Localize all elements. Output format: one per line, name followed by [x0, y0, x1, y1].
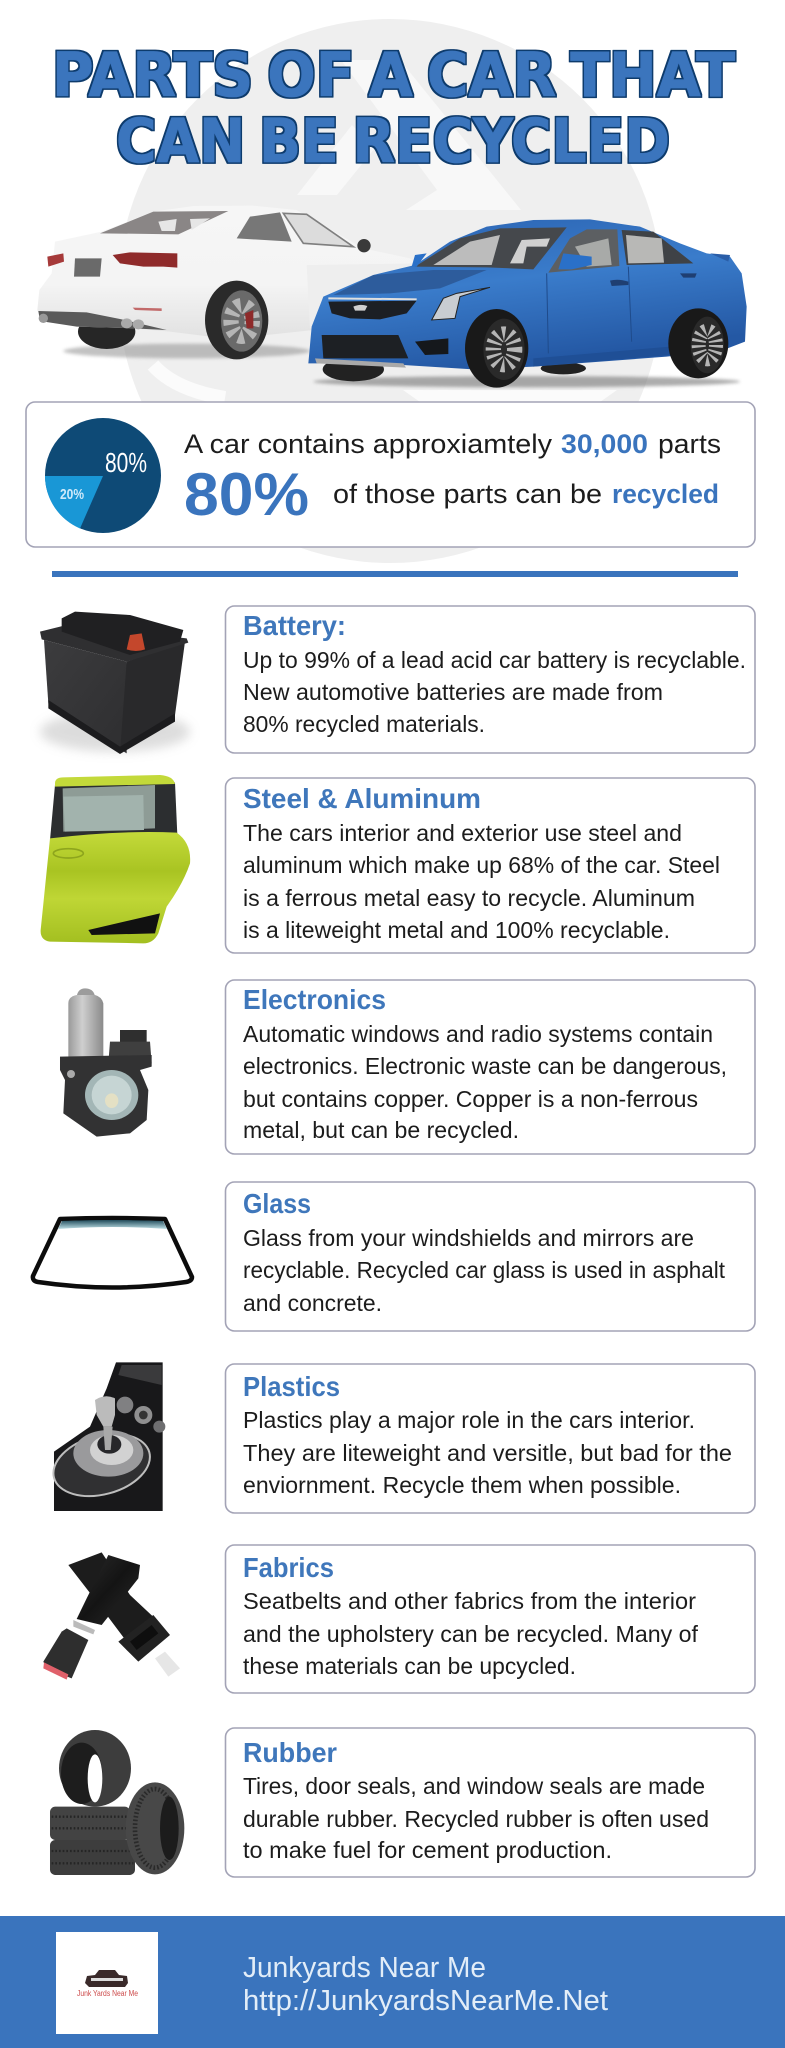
title: PARTS OF A CAR THAT	[52, 40, 735, 111]
panel: electronics: but contains copper. Copper is a non-ferrous	[243, 1086, 698, 1112]
statistic text: 30,000	[561, 429, 648, 459]
statistic text: 80%	[184, 461, 309, 528]
icon: window motor	[60, 988, 152, 1137]
panel: steel and aluminum: is a ferrous metal easy to recycle. Aluminum	[243, 885, 695, 911]
panel: steel and aluminum	[226, 778, 755, 953]
panel: electronics: electronics. Electronic waste can be dangerous,	[243, 1053, 727, 1079]
panel: plastics: Plastics	[243, 1371, 340, 1402]
footer text: Junkyards Near Me	[243, 1952, 486, 1984]
footer text: http://JunkyardsNearMe.Net	[243, 1985, 608, 2017]
title: CAN BE RECYCLED	[116, 106, 670, 177]
panel: glass: Glass from your windshields and mirrors are	[243, 1225, 694, 1251]
panel: steel and aluminum: aluminum which make up 68% of the car. Steel	[243, 852, 720, 878]
panel: battery: Battery:	[243, 610, 346, 641]
panel: glass	[226, 1182, 755, 1331]
panel: glass: recyclable. Recycled car glass is used in asphalt	[243, 1257, 726, 1283]
panel: rubber	[226, 1728, 755, 1877]
panel: fabrics: these materials can be upcycled.	[243, 1653, 576, 1679]
panel: glass: Glass	[243, 1188, 311, 1219]
pie chart: 80 / 20: 80%	[105, 447, 147, 478]
panel: fabrics: Fabrics	[243, 1552, 334, 1583]
background recycling symbol	[118, 19, 662, 563]
panel: glass: and concrete.	[243, 1290, 382, 1316]
panel: fabrics: and the upholstery can be recycled. Many of	[243, 1621, 699, 1647]
panel: key statistic	[26, 402, 755, 547]
panel: electronics: metal, but can be recycled.	[243, 1117, 519, 1143]
pie chart: 80 / 20	[45, 418, 161, 533]
title	[52, 40, 735, 177]
panel: plastics: They are liteweight and versitle, but bad for the	[243, 1440, 732, 1466]
panel: electronics: Electronics	[243, 984, 386, 1015]
statistic text	[184, 429, 721, 528]
icon: tires	[50, 1730, 184, 1875]
panel: battery: New automotive batteries are made from	[243, 679, 663, 705]
logo: Junk Yards Near Me	[77, 1989, 138, 1998]
panel: plastics: enviornment. Recycle them when possible.	[243, 1472, 681, 1498]
panel: battery: Up to 99% of a lead acid car battery is recyclable.	[243, 647, 746, 673]
logo	[56, 1932, 158, 2034]
statistic text: of those parts can be	[333, 479, 602, 509]
panel: fabrics: Seatbelts and other fabrics from the interior	[243, 1588, 696, 1614]
panel: battery: 80% recycled materials.	[243, 711, 485, 737]
panel: electronics	[226, 980, 755, 1154]
footer text	[243, 1952, 608, 2017]
divider	[52, 571, 738, 577]
illustration: blue car front view	[308, 219, 747, 388]
icon: seatbelt	[43, 1552, 180, 1680]
footer	[0, 1916, 785, 2048]
panel: steel and aluminum: The cars interior and exterior use steel and	[243, 820, 682, 846]
panel: electronics: Automatic windows and radio systems contain	[243, 1021, 713, 1047]
icon: car door	[41, 775, 190, 943]
statistic text: A car contains approxiamtely	[184, 429, 553, 459]
panel: steel and aluminum: Steel & Aluminum	[243, 783, 481, 814]
panel: plastics	[226, 1364, 755, 1513]
illustration: white car rear view	[37, 206, 420, 359]
panel: steel and aluminum: is a liteweight metal and 100% recyclable.	[243, 917, 670, 943]
icon: battery	[40, 612, 190, 754]
panel: plastics: Plastics play a major role in the cars interior.	[243, 1407, 695, 1433]
pie chart: 80 / 20: 20%	[60, 486, 84, 503]
panel: battery	[226, 606, 755, 753]
panel: rubber: durable rubber. Recycled rubber is often used	[243, 1806, 709, 1832]
panel: rubber: Rubber	[243, 1737, 337, 1768]
icon: gear shifter	[46, 1362, 165, 1511]
panel: rubber: to make fuel for cement production.	[243, 1837, 612, 1863]
icon: windshield	[33, 1218, 192, 1288]
panel: fabrics	[226, 1545, 755, 1693]
statistic text: recycled	[612, 479, 719, 509]
panel: rubber: Tires, door seals, and window seals are made	[243, 1773, 705, 1799]
statistic text: parts	[658, 429, 721, 459]
